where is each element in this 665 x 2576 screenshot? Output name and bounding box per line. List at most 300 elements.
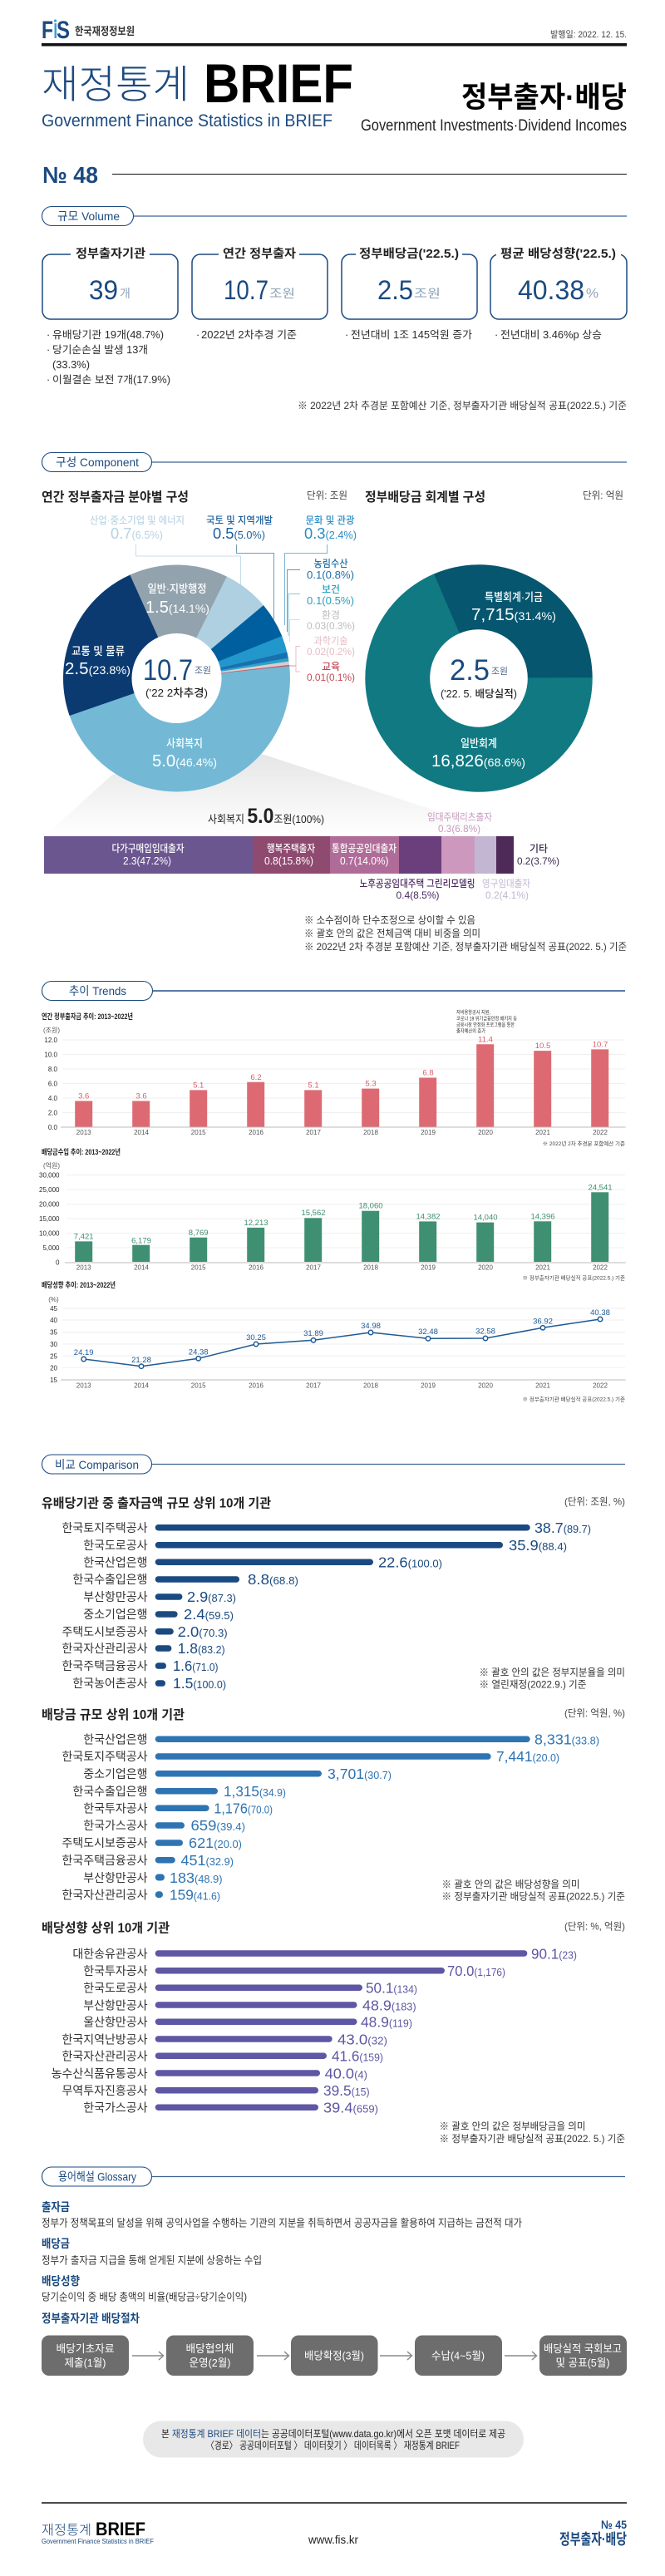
bar chart: 연간 정부출자금 추이: 2015	[191, 1129, 206, 1136]
heading: right donut: 정부배당금 회계별 구성	[365, 490, 485, 505]
external slice labels: 국토 및 지역개발	[206, 515, 273, 526]
line chart: 배당성향 추이: 2021	[535, 1382, 550, 1390]
line chart: 배당성향 추이: 34.98	[361, 1322, 381, 1331]
ranking: 배당성향 상위 10개: 배당성향 상위 10개 기관	[42, 1920, 170, 1935]
ranking: 출자금액 상위 10개: 한국자산관리공사	[62, 1642, 148, 1655]
bar chart: 배당금수입 추이: 20,000	[39, 1201, 60, 1209]
line chart: 배당성향 추이: 32.58	[475, 1327, 495, 1337]
ranking: 배당성향 상위 10개: 90.1(23)	[531, 1945, 577, 1962]
ranking: 출자금액 상위 10개: 중소기업은행	[83, 1608, 148, 1621]
outer labels: 영구임대출자	[482, 878, 530, 889]
step 2: 배당협의체	[186, 2342, 234, 2355]
title: BRIEF: BRIEF	[204, 52, 353, 114]
line chart: 배당성향 추이: 35	[50, 1329, 58, 1337]
section header: Glossary	[42, 2167, 625, 2186]
step 5: 배당실적 국회보고	[544, 2342, 622, 2355]
card: 정부배당금: 2.5	[377, 275, 413, 305]
segments	[44, 836, 514, 874]
left donut centre	[143, 654, 211, 699]
bar chart: 연간 정부출자금 추이: 2.0	[48, 1109, 58, 1117]
ranking: 출자금액 상위 10개: 한국농어촌공사	[72, 1677, 148, 1690]
ranking: 배당성향 상위 10개: 39.5(15)	[323, 2082, 370, 2099]
bullets: 정부출자기관: ·	[47, 374, 50, 386]
ranking: 배당금 상위 10개: 부산항만공사	[83, 1871, 148, 1884]
ranking: 배당금 상위 10개	[42, 1707, 625, 1904]
section header: Comparison: 비교 Comparison	[55, 1458, 139, 1471]
line chart: 배당성향 추이: 2015	[191, 1382, 206, 1390]
bar chart: 배당금수입 추이: 24,541	[588, 1184, 613, 1192]
ranking: 배당금 상위 10개: 배당금 규모 상위 10개 기관	[42, 1707, 185, 1722]
step 4	[415, 2336, 502, 2376]
ranking: 배당금 상위 10개: 1,176(70.0)	[214, 1800, 273, 1817]
line chart: 배당성향 추이: 24.19	[74, 1348, 94, 1357]
glossary: 출자금: 정부가 정책목표의 달성을 위해 공익사업을 수행하는 기관의 지분을 취득하면서 공공자금을 활용하여 지급하는 금전적 대가	[42, 2216, 522, 2229]
annotation: 출자예산의 증가	[456, 1027, 485, 1034]
annotation	[456, 1009, 517, 1034]
bar title: 사회복지 5.0조원(100%)	[208, 805, 324, 828]
external slice labels: 0.1(0.5%)	[307, 595, 354, 607]
ranking: 배당금 상위 10개: 7,441(20.0)	[496, 1748, 559, 1765]
ranking: 배당성향 상위 10개: 70.0(1,176)	[447, 1963, 505, 1979]
glossary: 배당성향: 배당성향	[42, 2274, 80, 2288]
left donut slice labels: 사회복지	[166, 737, 203, 750]
data notice: 〈경로〉 공공데이터포털 〉 데이터찾기 〉 데이터목록 〉 재정통계 BRIEF	[206, 2440, 460, 2451]
line chart: 배당성향 추이: 2022	[593, 1382, 608, 1390]
ranking: 출자금액 상위 10개	[42, 1496, 625, 1692]
stacked bar: 사회복지 breakdown	[44, 805, 627, 953]
arrow	[380, 2352, 412, 2360]
issue number: № 48	[42, 162, 98, 188]
external slice labels: 0.1(0.8%)	[307, 569, 354, 581]
footer logo: BRIEF	[96, 2519, 145, 2539]
line chart: 배당성향 추이: 30	[50, 1341, 58, 1348]
right donut centre	[441, 654, 517, 700]
bullets: 정부출자기관: ·	[47, 329, 50, 341]
segment labels: 0.8(15.8%)	[264, 855, 313, 867]
bar chart: 배당금수입 추이: 2015	[191, 1263, 206, 1272]
card: 평균 배당성향: %	[586, 287, 598, 301]
bar chart: 배당금수입 추이: (억원)	[43, 1161, 60, 1170]
bar chart: 연간 정부출자금 추이: 2017	[306, 1129, 321, 1136]
bullets: 정부출자기관	[47, 329, 170, 386]
card: 연간 정부출자	[192, 247, 328, 319]
ranking: 출자금액 상위 10개: 38.7(89.7)	[534, 1519, 591, 1536]
card: 연간 정부출자: 10.7	[224, 275, 268, 305]
left donut centre: 10.7	[143, 654, 193, 687]
step 4: 수납(4~5월)	[431, 2349, 485, 2362]
bar chart: 배당금수입 추이: 14,382	[416, 1212, 441, 1222]
line chart: 배당성향 추이: 45	[50, 1305, 58, 1313]
bar chart: 배당금수입 추이: 2013	[76, 1263, 91, 1272]
external slice labels: 0.5(5.0%)	[213, 525, 265, 542]
arrow	[505, 2352, 537, 2360]
line chart: 배당성향 추이: 2019	[421, 1382, 436, 1390]
bar chart: 연간 정부출자금 추이: 0.0	[48, 1124, 58, 1131]
bar chart: 연간 정부출자금 추이: 5.1	[193, 1081, 204, 1090]
ranking: 출자금액 상위 10개: 2.0(70.3)	[178, 1623, 228, 1640]
arrow	[132, 2352, 163, 2360]
external slice labels	[90, 515, 357, 683]
section header: Trends: 추이 Trends	[69, 984, 126, 997]
ranking: 배당금 상위 10개: 1,315(34.9)	[224, 1783, 286, 1800]
section header: Glossary: 용어해설 Glossary	[58, 2170, 136, 2183]
left donut centre: ('22 2차추경)	[145, 687, 208, 699]
ranking: 배당성향 상위 10개: 48.9(119)	[361, 2013, 412, 2030]
right donut labels: 특별회계·기금	[485, 591, 543, 603]
line chart: 배당성향 추이	[42, 1280, 626, 1403]
outer labels: 0.2(4.1%)	[485, 889, 529, 901]
external slice labels: 교육	[322, 661, 340, 672]
ranking: 배당금 상위 10개: ※ 괄호 안의 값은 배당성향을 의미	[442, 1879, 580, 1890]
line chart: 배당성향 추이: 2014	[134, 1382, 149, 1390]
left donut slice labels: 교통 및 물류	[71, 645, 125, 658]
glossary: 배당성향	[42, 2274, 247, 2303]
ranking: 배당금 상위 10개: 한국자산관리공사	[62, 1889, 148, 1902]
card: 연간 정부출자: 조원	[269, 287, 295, 300]
annotation: 코로나 19 위기금융안정 패키지 등	[456, 1016, 517, 1022]
card: 정부출자기관: 정부출자기관	[76, 247, 145, 261]
outer labels: 0.4(8.5%)	[396, 889, 439, 901]
right donut labels: 7,715(31.4%)	[471, 606, 556, 624]
footer	[42, 2503, 627, 2548]
bar chart: 배당금수입 추이: 15,562	[301, 1209, 326, 1218]
step 1	[42, 2336, 129, 2376]
bar chart: 연간 정부출자금 추이: 6.0	[48, 1081, 58, 1087]
line chart: 배당성향 추이: 배당성향 추이: 2013~2022년	[42, 1280, 116, 1289]
heading: left donut: 연간 정부출자금 분야별 구성	[42, 490, 189, 505]
glossary: 배당금: 정부가 출자금 지급을 통해 얻게된 지분에 상응하는 수입	[42, 2254, 262, 2266]
website: www.fis.kr	[308, 2533, 358, 2546]
bullet: 2차추경: ·	[196, 329, 200, 341]
bar chart: 배당금수입 추이: 2021	[535, 1263, 550, 1272]
ranking: 출자금액 상위 10개: (단위: 조원, %)	[564, 1496, 625, 1508]
bar chart: 배당금수입 추이: 7,421	[74, 1232, 94, 1242]
line chart: 배당성향 추이: 40	[50, 1317, 58, 1324]
card: 평균 배당성향: 40.38	[518, 275, 584, 305]
ranking: 배당성향 상위 10개: ※ 정부출자기관 배당실적 공표(2022. 5.) 기준	[439, 2133, 625, 2145]
bullets: 정부출자기관: ·	[47, 344, 50, 356]
note: ※ 2022년 2차 추경분 포함예산 기준, 정부출자기관 배당실적 공표(2022.5.) 기준	[298, 400, 627, 411]
right donut centre: 2.5	[450, 654, 490, 687]
ranking: 출자금액 상위 10개: 1.8(83.2)	[178, 1640, 225, 1657]
organisation name: 한국재정정보원	[75, 25, 135, 37]
ranking: 배당성향 상위 10개: 한국지역난방공사	[62, 2033, 148, 2047]
ranking: 배당성향 상위 10개: 41.6(159)	[332, 2048, 383, 2065]
line chart: 배당성향 추이: 21.28	[131, 1356, 151, 1365]
section header: Component: 구성 Component	[56, 456, 139, 469]
bullets: 정부출자기관: 이월결손 보전 7개(17.9%)	[52, 374, 170, 386]
right donut centre: ('22. 5. 배당실적)	[441, 688, 517, 700]
icon: FIS logo: F	[42, 17, 53, 44]
bar chart: 연간 정부출자금 추이: 11.4	[478, 1035, 493, 1044]
bar chart: 배당금수입 추이: 0	[56, 1258, 60, 1267]
ranking: 배당금 상위 10개: 451(32.9)	[181, 1852, 234, 1869]
bar chart: 배당금수입 추이: 14,040	[473, 1214, 498, 1222]
right donut labels	[431, 591, 556, 771]
bar chart: 배당금수입 추이: 12,213	[244, 1219, 268, 1228]
line chart: 배당성향 추이: 25	[50, 1352, 58, 1360]
donut chart: left	[65, 567, 288, 790]
footer issue	[559, 2518, 627, 2548]
bar chart: 배당금수입 추이: 2022	[593, 1263, 608, 1272]
ranking: 배당금 상위 10개: 한국투자공사	[83, 1802, 148, 1815]
glossary: 배당성향: 당기순이익 중 배당 총액의 비율(배당금÷당기순이익)	[42, 2291, 247, 2303]
bullet: 전년대비 배당금: 전년대비 1조 145억원 증가	[351, 329, 473, 341]
card: 정부배당금: 조원	[414, 287, 441, 300]
annotation: 금융시장 안정화 프로그램을 통한	[456, 1022, 515, 1028]
ranking: 출자금액 상위 10개: 한국주택금융공사	[62, 1659, 148, 1672]
issue date: 발행일: 2022. 12. 15.	[550, 28, 627, 40]
bar chart: 배당금수입 추이: ※ 정부출자기관 배당실적 공표(2022.5.) 기준	[523, 1273, 625, 1282]
ranking: 출자금액 상위 10개: 8.8(68.8)	[248, 1571, 298, 1588]
ranking: 출자금액 상위 10개: 22.6(100.0)	[378, 1554, 442, 1571]
ranking: 출자금액 상위 10개: 1.5(100.0)	[173, 1675, 226, 1692]
segment labels: 다가구매입임대출자	[111, 842, 185, 855]
ranking: 출자금액 상위 10개: 2.9(87.3)	[187, 1588, 236, 1605]
ranking: 배당성향 상위 10개	[42, 1920, 625, 2145]
ranking: 출자금액 상위 10개: 한국수출입은행	[72, 1573, 148, 1586]
step 2: 운영(2월)	[190, 2357, 231, 2369]
ranking: 출자금액 상위 10개: 1.6(71.0)	[173, 1657, 218, 1674]
left donut slice labels	[65, 583, 217, 771]
ranking: 출자금액 상위 10개: 주택도시보증공사	[62, 1625, 148, 1638]
ranking: 배당성향 상위 10개: 대한송유관공사	[72, 1947, 148, 1960]
data notice	[143, 2421, 524, 2457]
line chart: 배당성향 추이: 32.48	[418, 1327, 438, 1337]
left donut slice labels: 1.5(14.1%)	[145, 598, 209, 617]
external slice labels: 환경	[322, 609, 340, 621]
left donut slice labels: 5.0(46.4%)	[152, 752, 217, 771]
bar chart: 연간 정부출자금 추이: 8.0	[48, 1066, 58, 1073]
segment labels	[111, 842, 397, 867]
ranking: 출자금액 상위 10개: ※ 열린재정(2022.9.) 기준	[479, 1679, 587, 1691]
ranking: 배당성향 상위 10개: 48.9(183)	[362, 1997, 416, 2013]
header rule	[42, 43, 627, 47]
bar chart: 연간 정부출자금 추이: 3.6	[78, 1092, 89, 1101]
external slice labels: 보건	[322, 584, 340, 595]
bar chart: 연간 정부출자금 추이: 5.3	[365, 1080, 377, 1089]
external slice labels: 0.01(0.1%)	[307, 673, 355, 683]
bar chart: 배당금수입 추이	[39, 1147, 626, 1282]
ranking: 배당성향 상위 10개: 43.0(32)	[337, 2032, 387, 2048]
glossary: 배당금	[42, 2237, 262, 2266]
panel: volume KPI cards	[42, 247, 627, 411]
bar chart: 연간 정부출자금 추이: 2016	[249, 1129, 264, 1136]
line chart: 배당성향 추이: 2020	[478, 1382, 493, 1390]
bar chart: 연간 정부출자금 추이: 2020	[478, 1129, 493, 1136]
bar chart: 연간 정부출자금 추이: 2021	[535, 1129, 550, 1136]
bullet: 전년대비 성향: 전년대비 3.46%p 상승	[500, 329, 602, 341]
footer logo	[42, 2519, 154, 2545]
step 5: 및 공표(5월)	[555, 2357, 610, 2369]
step 5	[539, 2336, 627, 2376]
ranking: 배당금 상위 10개: 한국산업은행	[83, 1732, 148, 1746]
bar chart: 배당금수입 추이: 2019	[421, 1263, 436, 1272]
line chart: 배당성향 추이: 36.92	[533, 1317, 553, 1327]
ranking: 배당금 상위 10개: 621(20.0)	[189, 1835, 242, 1851]
ranking: 배당금 상위 10개: 8,331(33.8)	[534, 1731, 599, 1747]
topic subtitle: Government Investments·Dividend Incomes	[361, 117, 627, 135]
external slice labels: 0.3(2.4%)	[304, 525, 357, 542]
bar chart: 배당금수입 추이: 2020	[478, 1263, 493, 1272]
bar chart: 배당금수입 추이: 14,396	[530, 1212, 555, 1222]
ranking: 배당성향 상위 10개: 무역투자진흥공사	[62, 2084, 148, 2097]
card: 정부출자기관: 개	[120, 287, 131, 300]
line chart: 배당성향 추이: 15	[50, 1377, 58, 1384]
arrow	[257, 2352, 289, 2360]
outer labels: 임대주택리츠출자	[427, 811, 492, 823]
external slice labels: 0.03(0.3%)	[307, 622, 355, 632]
bar chart: 배당금수입 추이: 25,000	[39, 1186, 60, 1194]
ranking: 배당금 상위 10개: 한국수출입은행	[72, 1785, 148, 1798]
right donut labels: 16,826(68.6%)	[431, 752, 525, 771]
ranking: 출자금액 상위 10개: 한국산업은행	[83, 1556, 148, 1569]
bar chart: 연간 정부출자금 추이: 5.1	[308, 1081, 319, 1090]
ranking: 배당금 상위 10개: 한국가스공사	[83, 1819, 148, 1832]
outer labels	[359, 811, 559, 901]
ranking: 배당금 상위 10개: 한국주택금융공사	[62, 1854, 148, 1867]
bar chart: 연간 정부출자금 추이: 10.7	[593, 1040, 608, 1049]
external slice labels: 산업·중소기업 및 에너지	[90, 515, 185, 526]
card: 정부배당금	[342, 247, 477, 319]
external slice labels: 과학기술	[314, 635, 347, 647]
ranking: 출자금액 상위 10개: 부산항만공사	[83, 1590, 148, 1603]
ranking: 배당금 상위 10개: ※ 정부출자기관 배당실적 공표(2022.5.) 기준	[442, 1890, 625, 1902]
bar chart: 연간 정부출자금 추이: 연간 정부출자금 추이: 2013~2022년	[42, 1012, 133, 1021]
bar chart: 연간 정부출자금 추이: (조원)	[43, 1027, 60, 1034]
bar chart: 연간 정부출자금 추이: ※ 2022년 2차 추경분 포함예산 기준	[543, 1140, 625, 1147]
bar chart: 배당금수입 추이: 6,179	[131, 1237, 151, 1245]
footer logo: 재정통계	[42, 2523, 91, 2538]
notes	[304, 914, 627, 953]
ranking: 배당금 상위 10개: 183(48.9)	[170, 1869, 223, 1886]
bar chart: 연간 정부출자금 추이: 6.8	[422, 1069, 434, 1077]
line chart: 배당성향 추이: ※ 정부출자기관 배당실적 공표(2022.5.) 기준	[523, 1395, 625, 1403]
leader lines	[136, 544, 328, 672]
bar chart: 배당금수입 추이: 2016	[249, 1263, 264, 1272]
footer logo: Government Finance Statistics in BRIEF	[42, 2537, 154, 2545]
ranking: 배당금 상위 10개: 주택도시보증공사	[62, 1836, 148, 1849]
bar chart: 연간 정부출자금 추이: 10.0	[44, 1051, 58, 1059]
heading: left donut	[42, 490, 347, 505]
ranking: 배당성향 상위 10개: 한국가스공사	[83, 2101, 148, 2115]
bar chart: 배당금수입 추이: 8,769	[189, 1229, 209, 1238]
card: 평균 배당성향	[490, 247, 627, 319]
ranking: 출자금액 상위 10개: 유배당기관 중 출자금액 규모 상위 10개 기관	[42, 1496, 271, 1511]
bar chart: 연간 정부출자금 추이: 6.2	[250, 1073, 262, 1082]
bar chart: 배당금수입 추이: 15,000	[39, 1215, 60, 1223]
bar chart: 연간 정부출자금 추이: 2014	[134, 1129, 149, 1136]
line chart: 배당성향 추이: 40.38	[590, 1308, 610, 1318]
line chart: 배당성향 추이: 31.89	[303, 1329, 323, 1338]
icon: FIS logo: S	[57, 17, 70, 44]
step 3	[291, 2336, 377, 2376]
outer labels: 기타	[530, 843, 548, 855]
subtitle English: Government Finance Statistics in BRIEF	[42, 111, 332, 131]
annotation: 저비용항공사 지원,	[456, 1009, 490, 1016]
heading: right donut	[365, 490, 623, 505]
card: 정부배당금: 정부배당금('22.5.)	[359, 247, 459, 261]
external slice labels: 0.02(0.2%)	[307, 648, 355, 658]
right donut labels: 일반회계	[461, 737, 497, 750]
ranking: 배당성향 상위 10개: 한국자산관리공사	[62, 2050, 148, 2063]
segment labels: 통합공공임대출자	[332, 842, 397, 855]
bar chart: 연간 정부출자금 추이: 2022	[593, 1129, 608, 1136]
ranking: 배당성향 상위 10개: 울산항만공사	[83, 2015, 148, 2028]
bullets: 정부출자기관: 당기순손실 발생 13개	[52, 344, 148, 356]
external slice labels: 농림수산	[314, 558, 347, 569]
title: Korean: 재정통계	[42, 62, 190, 106]
line chart: 배당성향 추이: 20	[50, 1364, 58, 1372]
bar chart: 배당금수입 추이: 5,000	[42, 1244, 60, 1252]
bar chart: 연간 정부출자금 추이: 3.6	[135, 1092, 147, 1101]
bar chart: 배당금수입 추이: 2018	[363, 1263, 378, 1272]
ranking: 배당성향 상위 10개: 40.0(4)	[325, 2065, 367, 2081]
ranking: 출자금액 상위 10개: 35.9(88.4)	[509, 1537, 567, 1554]
ranking: 배당성향 상위 10개: 39.4(659)	[323, 2100, 378, 2116]
section header: Volume: 규모 Volume	[57, 209, 120, 223]
bar chart: 연간 정부출자금 추이: 12.0	[44, 1037, 58, 1044]
glossary: 출자금	[42, 2200, 522, 2229]
step 1: 제출(1월)	[65, 2357, 106, 2369]
footer issue: 정부출자·배당	[559, 2531, 627, 2548]
segment labels: 2.3(47.2%)	[123, 855, 171, 867]
line chart: 배당성향 추이: 2016	[249, 1382, 264, 1390]
outer labels: 노후공공임대주택 그린리모델링	[359, 878, 475, 889]
heading: 배당절차: 정부출자기관 배당절차	[42, 2312, 140, 2325]
line chart: 배당성향 추이: (%)	[48, 1296, 59, 1303]
glossary: 출자금: 출자금	[42, 2200, 70, 2214]
bullets: 정부출자기관: (33.3%)	[52, 359, 90, 371]
bar chart: 연간 정부출자금 추이: 10.5	[535, 1042, 550, 1051]
ranking: 출자금액 상위 10개: 한국토지주택공사	[62, 1521, 148, 1534]
card: 정부출자기관: 39	[89, 275, 118, 305]
ranking: 출자금액 상위 10개: 한국도로공사	[83, 1539, 148, 1552]
ranking: 배당성향 상위 10개: 50.1(134)	[366, 1980, 417, 1997]
ranking: 배당금 상위 10개: 중소기업은행	[83, 1767, 148, 1781]
notes: ※ 괄호 안의 값은 전체금액 대비 비중을 의미	[304, 928, 480, 939]
ranking: 배당성향 상위 10개: (단위: %, 억원)	[564, 1920, 625, 1932]
heading: left donut: 단위: 조원	[307, 490, 347, 501]
step 3: 배당확정(3월)	[304, 2349, 364, 2362]
bar chart: 연간 정부출자금 추이: 4.0	[48, 1095, 58, 1102]
ranking: 배당금 상위 10개: (단위: 억원, %)	[564, 1707, 625, 1719]
left donut slice labels: 일반·지방행정	[148, 583, 206, 595]
topic title: 정부출자·배당	[461, 81, 627, 114]
icon: FIS logo	[42, 17, 70, 44]
outer labels: 0.2(3.7%)	[517, 855, 559, 867]
section header: Comparison	[42, 1455, 625, 1474]
line chart: 배당성향 추이: 24.38	[189, 1348, 209, 1357]
ranking: 배당금 상위 10개: 한국토지주택공사	[62, 1750, 148, 1763]
data notice: 본 재정통계 BRIEF 데이터는 공공데이터포털(www.data.go.kr)에서 오픈 포맷 데이터로 제공	[161, 2428, 505, 2440]
bar chart: 배당금수입 추이: 2017	[306, 1263, 321, 1272]
ranking: 배당금 상위 10개: 159(41.6)	[170, 1887, 220, 1904]
external slice labels: 0.7(6.5%)	[111, 525, 163, 542]
ranking: 출자금액 상위 10개: ※ 괄호 안의 값은 정부지분율을 의미	[479, 1667, 625, 1678]
step 1: 배당기초자료	[57, 2342, 115, 2355]
segment labels: 행복주택출자	[267, 842, 315, 855]
heading: right donut: 단위: 억원	[583, 490, 623, 501]
ranking: 배당성향 상위 10개: 한국도로공사	[83, 1982, 148, 1995]
process flow	[42, 2336, 627, 2376]
glossary: 배당금: 배당금	[42, 2237, 70, 2250]
bullet: 2차추경: 2022년 2차추경 기준	[201, 329, 297, 341]
bar chart: 연간 정부출자금 추이: 2013	[76, 1129, 91, 1136]
callout wedge from donut to bar	[44, 754, 514, 836]
line chart: 배당성향 추이: 2013	[76, 1382, 91, 1390]
left donut centre: 조원	[195, 665, 211, 676]
